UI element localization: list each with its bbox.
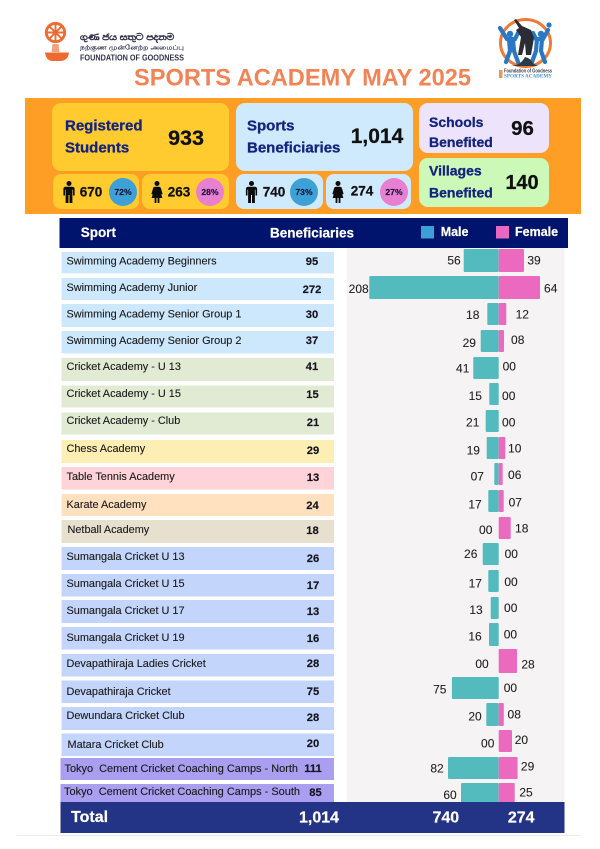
row: Table Tennis Academy: [62, 467, 334, 490]
bars: Sumangala U 17: 00: [504, 601, 518, 615]
bars: Swimming Senior 1: [466, 303, 529, 325]
row: Devapathiraja Ladies Cricket: 28: [307, 658, 319, 670]
row: Devapathiraja Cricket: 75: [307, 686, 319, 698]
bars: Chess: 10: [508, 442, 522, 456]
legend: male: Male: [441, 225, 469, 239]
row: Dewundara Cricket Club: Dewundara Cricket Club: [66, 710, 185, 722]
row: Sumangala Cricket U 19: Sumangala Cricket U 19: [66, 632, 185, 644]
row: Devapathiraja Ladies Cricket: Devapathiraja Ladies Cricket: [66, 658, 206, 670]
row: Cricket Academy U 13: 41: [306, 361, 318, 373]
row: Swimming Academy Junior: 272: [303, 284, 321, 296]
card: registered students: Registered: [65, 118, 143, 134]
row: Dewundara Cricket Club: [62, 707, 334, 730]
bars: Tokyo South: 60: [443, 788, 457, 802]
bars: Netball: 18: [515, 522, 529, 536]
card: villages benefited: Villages: [429, 163, 482, 179]
bars: Sumangala U 19: 16: [468, 630, 482, 644]
row: Sumangala Cricket U 13: Sumangala Cricket U 13: [66, 551, 185, 563]
row: Tokyo Cement South: [60, 784, 334, 802]
row: Swimming Academy Beginners: 95: [306, 256, 318, 268]
bars: Devapathiraja Ladies: 28: [521, 657, 535, 671]
panel: sport list: [60, 252, 334, 802]
bars: Table Tennis: 06: [508, 468, 522, 482]
card: male students: 670: [80, 184, 102, 200]
row: Cricket Academy U 15: [62, 386, 334, 408]
card: villages benefited: 140: [505, 172, 539, 194]
icon: male: [63, 181, 75, 203]
bars: Cricket U 15: [469, 383, 516, 405]
bars: Matara: [481, 730, 528, 752]
total row: Total: [71, 809, 108, 826]
bars: Sumangala U 15: 00: [504, 575, 518, 589]
row: Sumangala Cricket U 19: 16: [307, 633, 319, 645]
bars: Cricket U 13: [456, 357, 516, 379]
row: Matara Cricket Club: 20: [307, 738, 319, 750]
row: Swimming Academy Senior Group 1: 30: [306, 309, 318, 321]
bars: Table Tennis: [471, 463, 522, 485]
bars: Cricket U 15: 15: [469, 389, 482, 403]
row: Devapathiraja Cricket: [62, 680, 334, 703]
legend: male: [421, 225, 469, 239]
bars: Swimming Senior 1: 18: [466, 308, 480, 322]
row: Cricket Academy Club: Cricket Academy - Club: [66, 415, 180, 427]
bars: Tokyo North: [430, 757, 535, 779]
icon: left player: [500, 28, 518, 62]
row: Sumangala Cricket U 13: 26: [307, 553, 319, 565]
row: Cricket Academy U 15: Cricket Academy - U 15: [66, 388, 181, 400]
logo: Foundation of Goodness: [45, 23, 184, 62]
table header: Beneficiaries: [270, 226, 354, 240]
icon: swimmer: [511, 57, 538, 66]
bars: Karate: 17: [468, 498, 482, 512]
card: sports beneficiaries: Sports: [247, 118, 295, 134]
bars: Devapathiraja Ladies: [475, 649, 535, 673]
total row: [60, 802, 564, 833]
bars: Swimming Senior 1: 12: [516, 308, 529, 322]
icon: right player: [532, 22, 552, 62]
card: sports beneficiaries: 1,014: [351, 125, 404, 148]
row: Tokyo Cement North: [60, 758, 334, 780]
row: Sumangala Cricket U 17: [62, 600, 334, 623]
legend: female: [496, 225, 558, 239]
bars: Swimming Senior 2: 08: [511, 333, 525, 347]
row: Matara Cricket Club: Matara Cricket Club: [68, 739, 164, 751]
bars: Netball: [479, 517, 529, 539]
bars: Tokyo South: [443, 783, 533, 803]
card: male students: [53, 174, 139, 209]
bars: Chess: [467, 437, 522, 459]
card: female beneficiaries: 274: [351, 184, 374, 198]
card: female students: 263: [168, 184, 191, 200]
row: Swimming Academy Junior: [62, 278, 334, 300]
bars: Chess: 19: [467, 444, 480, 458]
card: sports beneficiaries: Beneficiaries: [247, 140, 340, 156]
bars: Dewundara: 20: [468, 710, 482, 724]
row: Karate Academy: Karate Academy: [66, 499, 147, 511]
bars: Swimming Beginners: 39: [527, 254, 541, 268]
bars: Table Tennis: 07: [471, 470, 484, 484]
card: schools benefited: Schools: [429, 114, 484, 130]
card: male beneficiaries: 740: [263, 184, 285, 200]
card: villages benefited: Benefited: [429, 185, 493, 201]
card: villages benefited: [419, 158, 549, 207]
row: Tokyo Cement South: 85: [309, 787, 322, 799]
card: registered students: [52, 103, 229, 171]
card: male beneficiaries: [236, 174, 323, 209]
bars: Swimming Junior: 64: [544, 282, 558, 296]
row: Swimming Academy Senior Group 2: Swimming Academy Senior Group 2: [66, 335, 241, 347]
total row: 1,014: [299, 810, 339, 826]
row: Sumangala Cricket U 17: 13: [307, 606, 319, 618]
bars: Tokyo North: 82: [430, 761, 444, 775]
bars: Swimming Senior 2: [463, 330, 525, 352]
logo text: Sinhala: ගුණ ජය සතුට පදනම: [80, 32, 175, 43]
row: Cricket Academy U 13: Cricket Academy - U 13: [66, 361, 181, 373]
bars: Swimming Senior 2: 29: [463, 336, 476, 350]
logo text: Tamil: நற்குண முன்னேற்ற அமைப்பு: [80, 44, 184, 54]
legend: female: Female: [515, 225, 558, 239]
logo: Sports Academy: [499, 19, 552, 80]
bars: Matara: 20: [515, 733, 528, 747]
row: Sumangala Cricket U 13: [62, 547, 334, 570]
row: Devapathiraja Ladies Cricket: [62, 654, 334, 676]
bars: Tokyo South: 25: [519, 786, 533, 800]
row: Swimming Academy Beginners: Swimming Academy Beginners: [66, 256, 217, 268]
card: female beneficiaries: 27%: [385, 187, 403, 197]
bars: Karate: [468, 490, 522, 512]
row: Swimming Academy Beginners: [62, 252, 334, 274]
bars: Devapathiraja: [433, 677, 517, 699]
bars: Dewundara: 08: [508, 708, 521, 722]
icon: male: [246, 181, 257, 203]
bars: Netball: 00: [479, 523, 493, 537]
bars: Swimming Beginners: 56: [447, 254, 461, 268]
card: schools benefited: 96: [511, 118, 534, 140]
bars: Sumangala U 15: 17: [469, 577, 482, 591]
row: Swimming Academy Junior: Swimming Academy Junior: [66, 282, 198, 294]
row: Sumangala Cricket U 15: 17: [307, 580, 319, 592]
icon: dharma wheel: [45, 23, 69, 61]
card: female beneficiaries: [326, 174, 411, 209]
bars: Sumangala U 17: [469, 597, 518, 619]
bars: Devapathiraja Ladies: 00: [475, 657, 489, 671]
icon: female: [332, 181, 344, 203]
logo caption: Foundation of Goodness: [504, 68, 552, 74]
logo caption: sports academy: SPORTS ACADEMY: [504, 74, 552, 80]
icon: orange ring: [500, 20, 550, 66]
bars: Swimming Junior: [349, 276, 558, 299]
row: Netball Academy: 18: [306, 525, 319, 537]
icon: female: [151, 181, 163, 203]
bars: Sumangala U 17: 13: [469, 603, 483, 617]
card: female students: [142, 174, 229, 209]
row: Karate Academy: [62, 494, 334, 516]
table header: Sport: [81, 225, 116, 240]
row: Swimming Academy Senior Group 2: [62, 331, 334, 354]
card: registered students: Students: [65, 140, 129, 156]
card: male students: 72%: [114, 187, 132, 197]
row: Table Tennis Academy: Table Tennis Academy: [66, 471, 175, 483]
bars: Devapathiraja: 00: [504, 681, 517, 695]
row: Sumangala Cricket U 19: [62, 627, 334, 650]
card: female students: 28%: [201, 187, 219, 197]
row: Chess Academy: Chess Academy: [66, 443, 146, 455]
icon: batsman: [514, 19, 534, 55]
row: Chess Academy: 29: [307, 445, 319, 457]
row: Swimming Academy Senior Group 1: [62, 304, 334, 327]
row: Devapathiraja Cricket: Devapathiraja Cricket: [66, 686, 171, 698]
row: Matara Cricket Club: [62, 734, 334, 756]
row: Cricket Academy U 15: 15: [306, 389, 319, 401]
row: Cricket Academy U 13: [62, 358, 334, 381]
card: sports beneficiaries: [236, 103, 413, 171]
row: Tokyo Cement North: 111: [304, 763, 322, 775]
bar chart: male and female beneficiaries: [347, 248, 564, 803]
card: male beneficiaries: 73%: [295, 187, 313, 197]
bars: Dewundara: [468, 703, 521, 726]
row: Sumangala Cricket U 15: [62, 574, 334, 596]
row: Chess Academy: [62, 440, 334, 463]
row: Swimming Academy Senior Group 2: 37: [306, 335, 318, 347]
card: registered students: 933: [168, 126, 204, 150]
bars: Swimming Junior: 208: [349, 282, 369, 296]
row: Table Tennis Academy: 13: [307, 472, 319, 484]
bars: Karate: 07: [509, 496, 522, 510]
bars: Cricket U 15: 00: [502, 389, 516, 403]
bars: Sumangala U 13: 26: [464, 547, 478, 561]
title: SPORTS ACADEMY MAY 2025: [134, 64, 471, 92]
bars: Cricket Club: 00: [502, 416, 516, 430]
bars: Cricket U 13: 41: [456, 362, 470, 376]
table header: [60, 218, 568, 248]
row: Cricket Academy Club: 21: [307, 417, 319, 429]
bars: Cricket Club: 21: [466, 416, 480, 430]
row: Tokyo Cement South: Tokyo Cement Cricket Coaching Camps - South: [64, 786, 300, 798]
bars: Tokyo North: 29: [521, 760, 535, 774]
row: Sumangala Cricket U 17: Sumangala Cricket U 17: [66, 605, 185, 617]
bars: Sumangala U 15: [469, 570, 518, 592]
bars: Devapathiraja: 75: [433, 682, 447, 696]
bars: Matara: 00: [481, 737, 495, 751]
bars: Sumangala U 13: [464, 543, 518, 565]
bars: Swimming Beginners: [447, 249, 541, 272]
icon: small emblem: [499, 70, 502, 78]
row: Karate Academy: 24: [306, 500, 319, 512]
row: Swimming Academy Senior Group 1: Swimming Academy Senior Group 1: [66, 309, 241, 321]
row: Netball Academy: [62, 520, 334, 543]
row: Sumangala Cricket U 15: Sumangala Cricket U 15: [66, 578, 185, 590]
row: Netball Academy: Netball Academy: [68, 524, 150, 536]
row: Tokyo Cement North: Tokyo Cement Cricket Coaching Camps - North: [64, 763, 298, 775]
total row: 274: [508, 810, 535, 826]
row: Cricket Academy Club: [62, 412, 334, 434]
row: Dewundara Cricket Club: 28: [307, 712, 319, 724]
total row: 740: [432, 810, 459, 826]
bars: Cricket U 13: 00: [503, 360, 516, 374]
bars: Sumangala U 19: 00: [504, 628, 517, 642]
bars: Cricket Club: [466, 410, 516, 432]
bars: Sumangala U 13: 00: [505, 547, 518, 561]
card: schools benefited: [419, 103, 549, 153]
card: schools benefited: Benefited: [429, 134, 493, 150]
panel: summary band: [25, 98, 581, 214]
bars: Sumangala U 19: [468, 623, 517, 646]
logo text: English: FOUNDATION OF GOODNESS: [80, 54, 184, 62]
